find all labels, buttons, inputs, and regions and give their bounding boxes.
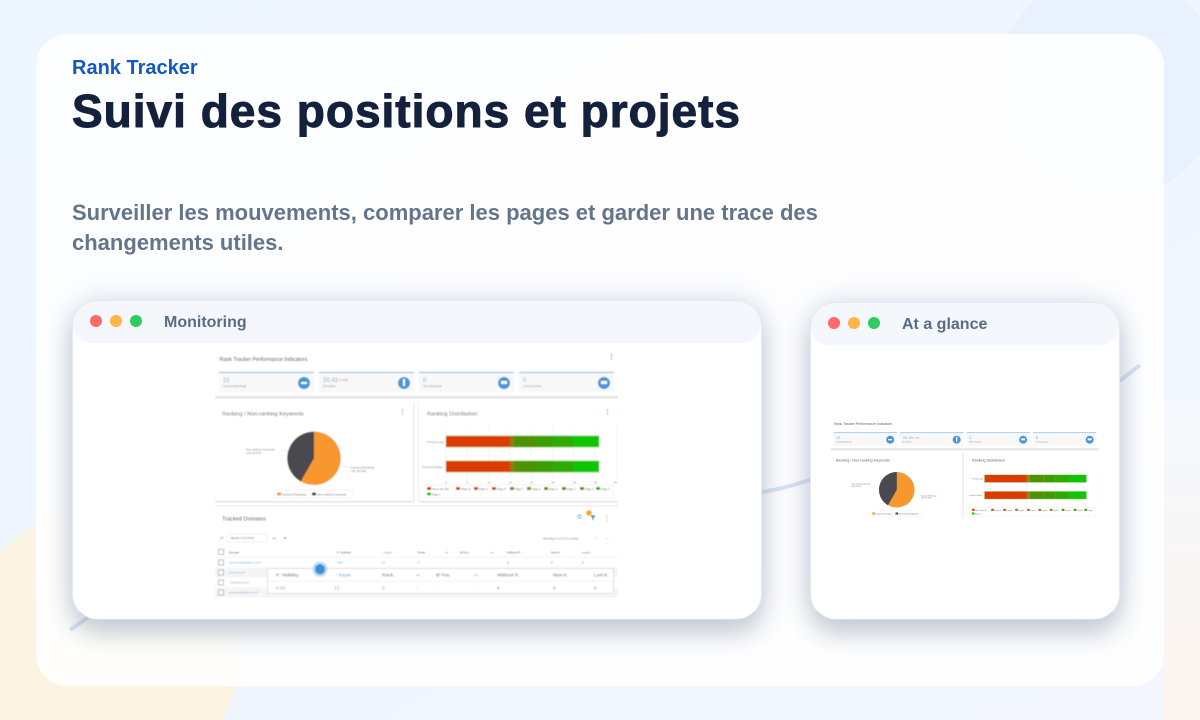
- distribution legend: Page 2: [601, 487, 610, 491]
- table rows: 0: [551, 560, 553, 564]
- axis labels: 15: [509, 480, 513, 484]
- distribution legend: Page 6: [532, 487, 541, 491]
- KPI card: keyword rankings: [219, 372, 314, 392]
- pie legend: [871, 511, 923, 516]
- table toolbar: 25: [272, 536, 276, 540]
- KPI card: lost keywords: Lost Keywords: [523, 384, 542, 388]
- screenshot: at a glance dashboard: [831, 422, 1099, 519]
- panel: tracked domains table: Tracked Domains: [222, 516, 266, 522]
- panel: ranking pie: Ranking / Non-ranking Keywords: [222, 412, 304, 418]
- panel: ranking pie: (21) 56.53%: [351, 469, 367, 473]
- table tools: ⋮: [604, 516, 610, 522]
- distribution legend: [971, 508, 1096, 516]
- KPI card: new keywords: 0: [423, 378, 427, 384]
- zoomed table callout: 12: [334, 586, 340, 592]
- distribution legend: Page 8: [1019, 510, 1024, 512]
- distribution legend: Page 4: [1065, 510, 1071, 512]
- table rows: 12: [382, 560, 386, 564]
- panel: ranking distribution: Ranking Distribution: [427, 412, 477, 418]
- panel: ranking pie: (21) 56.53%: [921, 498, 932, 500]
- table toolbar: Showing 1 to 6 of 6 entries: [543, 536, 579, 540]
- table rows: 0: [582, 560, 584, 564]
- heading: performance indicators: Rank Tracker Performance Indicators: [220, 357, 308, 363]
- stacked bar: previous day: [446, 435, 600, 448]
- zoomed table callout: +/-: [474, 572, 479, 578]
- zoomed table callout: Without R.: [497, 572, 519, 578]
- subtitle: changements utiles.: [72, 230, 284, 255]
- table rows: bouqs.com/*: [229, 570, 247, 574]
- distribution legend: Not in top 100: [432, 487, 449, 491]
- panel: ranking pie: [215, 402, 414, 502]
- KPI card: new keywords: New Keywords: [969, 441, 982, 443]
- distribution legend: Not in top 100: [975, 509, 986, 512]
- window title: Monitoring: Monitoring: [164, 314, 247, 331]
- distribution legend: Page 1: [975, 514, 981, 516]
- table header: ↑ Keyw.: [382, 550, 393, 554]
- distribution legend: Page 9: [479, 487, 488, 491]
- zoomed table callout: P. Visibility: [276, 572, 299, 578]
- distribution legend: Page 6: [1042, 510, 1047, 512]
- subtitle: [72, 200, 818, 255]
- panel: ranking pie: (19) 43.47%: [246, 451, 262, 455]
- KPI card: average position: Ø Position: [323, 384, 336, 388]
- table header: [218, 550, 592, 554]
- zoomed table callout: 0: [382, 586, 385, 592]
- distribution legend: Page 10: [995, 510, 1001, 512]
- panel: tracked domains table: [215, 510, 618, 598]
- KPI card: keyword rankings: 21: [836, 435, 842, 440]
- KPI card: average position: 20.43: [903, 435, 914, 440]
- zoomed table callout: 0: [594, 586, 597, 592]
- pie legend: Keyword Rankings: [282, 492, 307, 496]
- distribution legend: Page 5: [549, 487, 558, 491]
- window title: At a glance: At a glance: [902, 316, 987, 333]
- table header: Rank.: [418, 550, 426, 554]
- dot amber: [848, 317, 860, 329]
- dot red: [90, 315, 102, 327]
- pie legend: Non-ranking Keywords: [317, 492, 347, 496]
- eyebrow: Rank Tracker: Rank Tracker: [72, 57, 198, 79]
- KPI card: lost keywords: [519, 372, 614, 392]
- axis labels: 10: [488, 480, 491, 484]
- dot amber: [110, 315, 122, 327]
- zoomed table callout: ↑ Keyw.: [335, 572, 352, 578]
- panel: ranking distribution: Previous day: [972, 478, 983, 480]
- KPI card: lost keywords: 0: [523, 378, 527, 384]
- KPI card: new keywords: New Keywords: [423, 384, 442, 388]
- axis labels: 40: [614, 480, 618, 484]
- zoomed table callout: 0.00: [276, 586, 286, 592]
- dashboard screenshots: [215, 353, 1099, 597]
- KPI card: lost keywords: 0: [1036, 435, 1039, 440]
- panel: At a glance window: [810, 302, 1120, 620]
- pie legend: Keyword Rankings: [876, 514, 891, 516]
- table toolbar: [221, 534, 609, 542]
- heading: performance indicators: Rank Tracker Performance Indicators: [834, 422, 892, 426]
- KPI card: new keywords: [967, 432, 1030, 446]
- panel: ranking pie: Ranking / Non-ranking Keywords: [836, 458, 890, 462]
- panel: ranking distribution: Ranking Distribution: [972, 458, 1005, 462]
- KPI card: average position: [319, 372, 414, 392]
- KPI card: lost keywords: Lost Keywords: [1036, 440, 1048, 443]
- panel: ranking distribution: Previous day: [427, 440, 444, 444]
- zoomed table callout: 6: [497, 586, 500, 592]
- distribution legend: Page 7: [515, 487, 524, 491]
- table tools: [578, 510, 610, 522]
- KPI card: new keywords: [419, 372, 514, 392]
- pie chart: [879, 472, 915, 508]
- panel: ranking pie: (19) 43.47%: [852, 486, 862, 488]
- zoomed table callout: -: [436, 586, 438, 592]
- KPI card: average position: -0.19%: [339, 378, 348, 382]
- KPI card: keyword rankings: 21: [223, 378, 230, 384]
- subtitle: Surveiller les mouvements, comparer les pages et garder une trace des: [72, 200, 818, 225]
- table toolbar: SELECT ACTION: [230, 536, 254, 540]
- table header: Domain: [229, 550, 240, 554]
- distribution legend: Page 1: [432, 492, 441, 496]
- dot red: [828, 317, 840, 329]
- distribution legend: Page 2: [1088, 510, 1093, 512]
- KPI card: keyword rankings: Keyword Rankings: [223, 384, 247, 388]
- table rows: 0.00: [337, 560, 343, 564]
- distribution legend: [425, 485, 613, 498]
- table rows: [215, 560, 618, 598]
- panel: ranking distribution: [969, 458, 1098, 516]
- zoomed table callout: [268, 568, 614, 594]
- table rows: www.weddingwire.com/*: [229, 560, 262, 564]
- table header: Without R.: [507, 550, 521, 554]
- KPI card: average position: 20.43: [323, 378, 339, 384]
- window title bar: [73, 301, 761, 343]
- KPI card: keyword rankings: Keyword Rankings: [836, 441, 852, 443]
- axis labels: 25: [552, 480, 555, 484]
- table header: Ø Pos.: [460, 550, 469, 554]
- table rows: 6: [507, 560, 509, 564]
- distribution legend: Page 3: [1077, 510, 1083, 512]
- table toolbar: ›: [607, 536, 609, 541]
- panel: ranking distribution: Current Position: [969, 494, 982, 497]
- stacked bar: current position: [984, 491, 1087, 500]
- KPI card: average position: -0.19%: [913, 437, 920, 439]
- KPI card: new keywords: 0: [969, 435, 972, 440]
- distribution legend: Page 10: [461, 487, 472, 491]
- panel: ranking pie: Keyword Rankings: [351, 466, 375, 470]
- panel: ranking pie: ⋮: [399, 408, 406, 416]
- distribution legend: Page 5: [1053, 510, 1059, 512]
- table rows: www.proflowers.com/*: [229, 590, 259, 594]
- distribution legend: Page 4: [567, 487, 576, 491]
- zoomed table callout: +/-: [416, 572, 421, 578]
- window title bar: [811, 303, 1119, 345]
- title: Suivi des positions et projets: [72, 85, 741, 137]
- panel: ranking distribution: Current Position: [422, 465, 443, 469]
- panel: ranking pie: Keyword Rankings: [921, 496, 937, 498]
- table header: Lost K.: [582, 550, 592, 554]
- panel: ranking distribution: [418, 402, 618, 502]
- panel: ranking pie: Non-ranking Keywords: [852, 484, 870, 486]
- axis labels: 30: [573, 480, 577, 484]
- panel: ranking distribution: ⋮: [604, 408, 611, 416]
- table toolbar: ‹: [595, 536, 597, 541]
- panel: Monitoring window: [72, 300, 762, 620]
- pie chart: [287, 432, 341, 485]
- zoomed table callout: 0: [553, 586, 556, 592]
- dot green: [130, 315, 142, 327]
- distribution legend: Page 7: [1030, 510, 1036, 512]
- distribution legend: Page 9: [1007, 510, 1012, 512]
- KPI card: keyword rankings: [834, 432, 897, 446]
- table header: New K.: [551, 550, 561, 554]
- zoomed table callout: -: [416, 586, 418, 592]
- distribution legend: Page 3: [585, 487, 594, 491]
- table rows: *.flowerla.com/*: [229, 580, 251, 584]
- KPI card: average position: Ø Position: [903, 440, 911, 443]
- axis labels: 35: [594, 480, 598, 484]
- cursor highlight: [312, 562, 328, 577]
- screenshot: monitoring dashboard: [215, 353, 618, 598]
- KPI card: lost keywords: [1033, 432, 1096, 446]
- table rows: 0: [418, 560, 420, 564]
- zoomed table callout: Lost K.: [594, 572, 609, 578]
- pie legend: [275, 490, 353, 498]
- KPI card: average position: [900, 432, 963, 446]
- dot green: [868, 317, 880, 329]
- zoomed table callout: -: [474, 586, 476, 592]
- pie legend: Non-ranking Keywords: [899, 514, 918, 516]
- zoomed table callout: Ø Pos.: [436, 572, 451, 578]
- zoomed table callout: Rank.: [382, 572, 395, 578]
- axis labels: 0: [445, 480, 447, 484]
- table header: +/-: [445, 550, 449, 554]
- axis labels: 5: [466, 480, 468, 484]
- panel: ranking pie: Non-ranking Keywords: [246, 448, 275, 452]
- panel: ranking pie: [836, 452, 964, 519]
- zoomed table callout: New K.: [553, 572, 568, 578]
- distribution legend: Page 8: [497, 487, 506, 491]
- axis labels: 20: [530, 480, 534, 484]
- menu dots: ⋮: [608, 353, 615, 361]
- stacked bar: previous day: [984, 474, 1087, 483]
- table header: P. Visibility: [337, 550, 352, 554]
- stacked bar: current position: [446, 460, 600, 473]
- table header: +/-: [490, 550, 494, 554]
